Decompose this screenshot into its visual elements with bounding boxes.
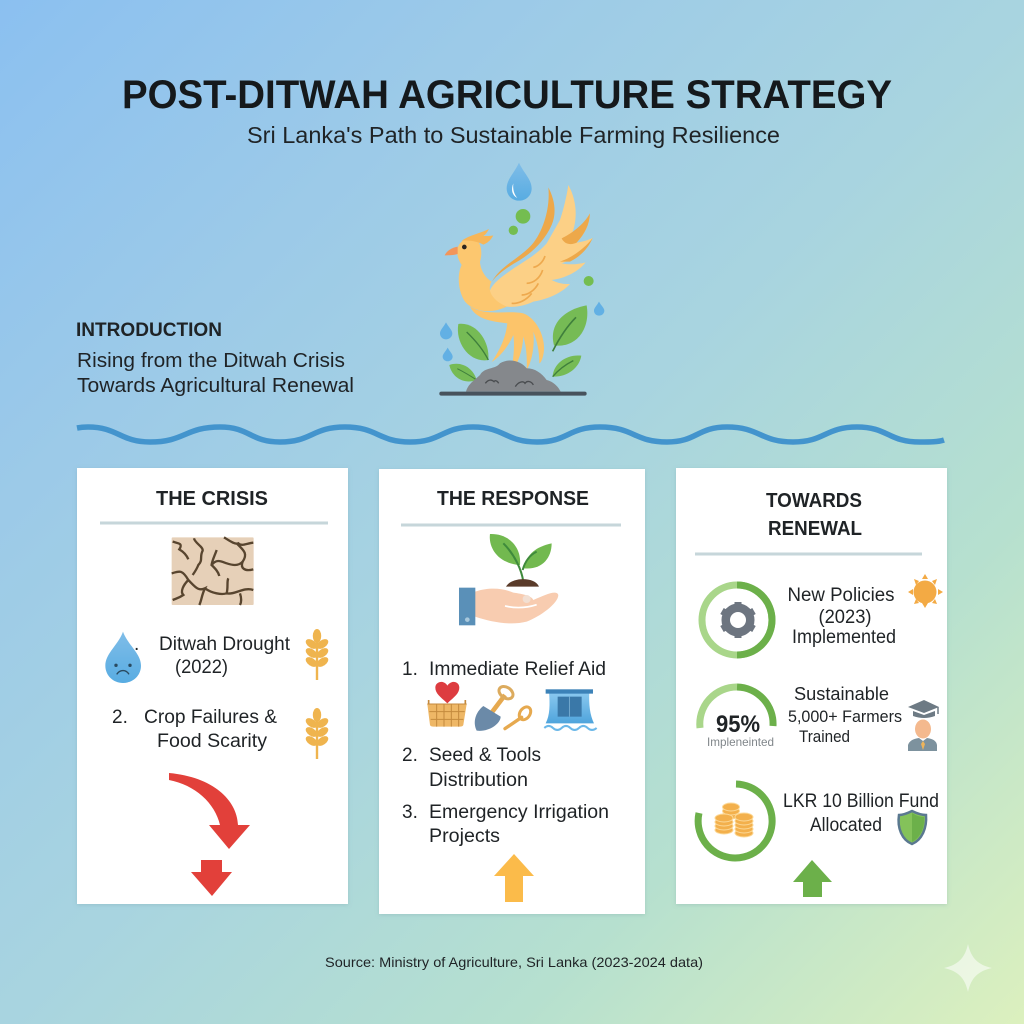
icon: shield bbox=[899, 811, 926, 844]
panel: towards renewal bbox=[676, 468, 947, 904]
text: fund: Allocated bbox=[810, 815, 882, 836]
phoenix beak bbox=[445, 247, 458, 255]
text: farmers trained: Trained bbox=[799, 727, 850, 746]
text: new policies: Implemented bbox=[792, 627, 896, 648]
icon: wheat 2 bbox=[304, 708, 330, 759]
text: farmers trained: Sustainable bbox=[794, 684, 889, 704]
item 2 text: 2. bbox=[112, 707, 128, 728]
introduction: Rising from the Ditwah Crisis bbox=[77, 350, 345, 372]
subtitle: Sri Lanka's Path to Sustainable Farming Resilience bbox=[247, 122, 780, 148]
green dots bbox=[509, 209, 594, 286]
icon: cracked earth bbox=[172, 537, 254, 605]
gauge: 95 percent bbox=[700, 687, 774, 749]
list item 3 bbox=[402, 802, 609, 847]
heading: the response: THE RESPONSE bbox=[437, 488, 589, 510]
text: new policies bbox=[788, 585, 896, 648]
arrow: curved red down bbox=[169, 773, 250, 849]
icon: dam with water bbox=[544, 689, 597, 730]
arrow: green up bbox=[793, 860, 832, 897]
item 2 text: Food Scarity bbox=[157, 731, 268, 752]
introduction: INTRODUCTION bbox=[76, 320, 222, 341]
introduction: Towards Agricultural Renewal bbox=[77, 375, 354, 397]
arrow: yellow up bbox=[494, 854, 534, 902]
gauge: coins bbox=[698, 784, 772, 858]
soil mound bbox=[466, 360, 561, 392]
small water drops bbox=[440, 302, 604, 361]
heading: towards renewal bbox=[766, 490, 862, 540]
phoenix wing bbox=[488, 185, 593, 307]
phoenix crest bbox=[462, 229, 493, 245]
text: new policies: (2023) bbox=[818, 607, 872, 628]
icon: graduate bbox=[908, 700, 939, 751]
introduction bbox=[76, 320, 354, 397]
heading: towards renewal: RENEWAL bbox=[768, 518, 862, 540]
phoenix eye bbox=[462, 245, 467, 249]
gauge: gear ring bbox=[702, 585, 772, 655]
heading: towards renewal: TOWARDS bbox=[766, 490, 862, 512]
gauge: 95 percent: Impleneinted bbox=[707, 735, 774, 749]
text: farmers trained: 5,000+ Farmers bbox=[788, 707, 902, 726]
sparkle bbox=[944, 944, 992, 992]
arrow: red down bbox=[191, 860, 232, 896]
item 1 text bbox=[134, 634, 291, 678]
icon: sad water drop bbox=[105, 632, 141, 683]
list item 3: 3. bbox=[402, 802, 418, 823]
icon: hand holding seedling bbox=[459, 534, 558, 625]
item 2 text bbox=[112, 707, 277, 752]
icon: wheat 1 bbox=[304, 629, 330, 680]
item 2 text: Crop Failures & bbox=[144, 707, 277, 728]
list item 1: Immediate Relief Aid bbox=[429, 659, 606, 680]
list item 2 bbox=[402, 745, 541, 791]
leaves bbox=[449, 305, 587, 381]
text: fund bbox=[783, 791, 939, 836]
text: fund: LKR 10 Billion Fund bbox=[783, 791, 939, 812]
list item 2: Seed & Tools bbox=[429, 745, 541, 766]
phoenix tail bbox=[470, 307, 544, 374]
item 1 text: . bbox=[134, 634, 139, 655]
list item 1: 1. bbox=[402, 659, 418, 680]
title: POST-DITWAH AGRICULTURE STRATEGY bbox=[122, 73, 892, 117]
source note: Source: Ministry of Agriculture, Sri Lanka (2023-2024 data) bbox=[325, 954, 703, 970]
list item 2: Distribution bbox=[429, 770, 528, 791]
ground line bbox=[441, 388, 585, 400]
item 1 text: Ditwah Drought bbox=[159, 634, 291, 655]
text: new policies: New Policies bbox=[788, 585, 894, 606]
phoenix body and head bbox=[457, 238, 507, 311]
icon: water drop above phoenix bbox=[507, 163, 532, 201]
phoenix wing markings bbox=[512, 256, 545, 303]
icon: heart basket bbox=[427, 682, 467, 727]
heading: the crisis: THE CRISIS bbox=[156, 488, 268, 510]
text: farmers trained bbox=[788, 684, 902, 746]
icons: basket, tools, irrigation bbox=[427, 682, 597, 731]
panel: the crisis bbox=[77, 468, 348, 904]
phoenix dark feathers bbox=[492, 187, 593, 282]
panel: the response bbox=[379, 469, 645, 914]
item 1 text: (2022) bbox=[175, 657, 228, 678]
gauge: 95 percent: 95% bbox=[716, 711, 760, 738]
icon: sun bbox=[908, 574, 943, 608]
list item 3: Emergency Irrigation bbox=[429, 802, 609, 823]
illustration: phoenix rising from soil bbox=[440, 163, 604, 394]
list item 2: 2. bbox=[402, 745, 418, 766]
icon: shovel and key tool bbox=[475, 684, 533, 731]
list item 3: Projects bbox=[429, 826, 500, 847]
